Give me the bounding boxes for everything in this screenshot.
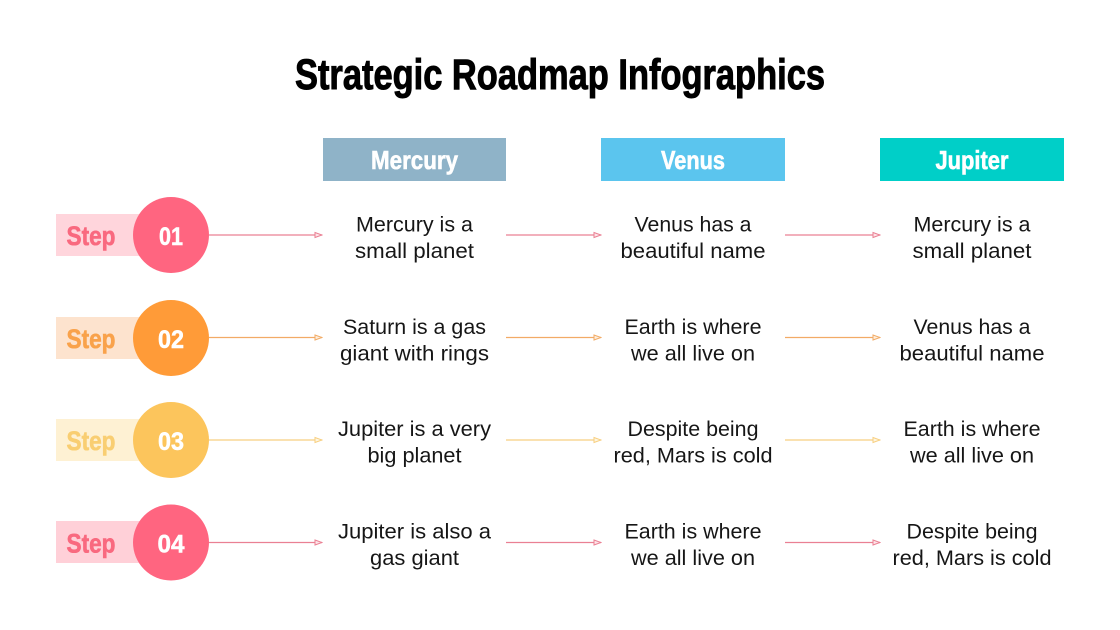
step 03 badge: 03 — [158, 428, 184, 456]
step 04 text: Earth is where — [624, 520, 762, 544]
step 04 text: we all live on — [630, 547, 755, 570]
step 04 badge — [56, 504, 209, 580]
step 03 text: Despite being — [628, 418, 758, 441]
step 02 text — [340, 316, 1044, 366]
step 02 text: beautiful name — [900, 342, 1044, 366]
step 01 text: Venus has a — [634, 214, 752, 236]
row: step 01 — [56, 197, 1032, 273]
header: Venus — [601, 138, 785, 181]
header: Mercury — [323, 138, 506, 181]
column headers — [323, 138, 1064, 181]
step 01 text: small planet — [355, 240, 474, 263]
step 01 text: beautiful name — [620, 240, 766, 263]
step 04 text — [338, 520, 1052, 570]
step 03 text — [338, 418, 1040, 468]
step 02 text: Earth is where — [624, 316, 762, 339]
step 03 arrows — [209, 439, 880, 441]
step 03 text: Jupiter is a very — [338, 418, 492, 441]
step 04 text: Despite being — [906, 520, 1038, 544]
step 01 text: Mercury is a — [914, 214, 1031, 236]
step 04 badge: Step — [66, 528, 116, 558]
row: step 03 — [56, 402, 1040, 478]
step 03 text: big planet — [368, 444, 462, 468]
step 01 text — [355, 214, 1032, 263]
step 02 badge — [56, 300, 209, 376]
title: Strategic Roadmap Infographics — [295, 51, 825, 99]
step 01 badge — [56, 197, 209, 273]
step 02 text: Saturn is a gas — [343, 316, 486, 339]
step 03 text: red, Mars is cold — [614, 444, 772, 468]
step 04 text: red, Mars is cold — [892, 547, 1052, 570]
step 03 text: we all live on — [909, 444, 1034, 468]
step 04 text: gas giant — [370, 547, 459, 570]
step 02 arrows — [209, 336, 880, 338]
step 01 arrows — [209, 234, 880, 236]
header: Mercury: Mercury — [371, 145, 458, 175]
step 02 text: Venus has a — [914, 316, 1031, 339]
step 01 text: Mercury is a — [356, 214, 473, 236]
header: Jupiter: Jupiter — [936, 145, 1008, 175]
step 02 text: we all live on — [630, 342, 755, 366]
step 01 badge: 01 — [159, 223, 183, 251]
header: Venus: Venus — [661, 145, 725, 175]
step 01 badge: Step — [66, 221, 116, 251]
step 03 badge — [56, 402, 209, 478]
step 04 text: Jupiter is also a — [338, 520, 491, 544]
step 04 badge: 04 — [158, 530, 185, 558]
header: Jupiter — [880, 138, 1064, 181]
step 04 arrows — [209, 542, 880, 544]
step 03 text: Earth is where — [904, 418, 1040, 441]
step 01 text: small planet — [912, 240, 1032, 263]
step 02 badge: Step — [66, 324, 116, 354]
row: step 02 — [56, 300, 1044, 376]
step 02 badge: 02 — [158, 326, 184, 354]
step 03 badge: Step — [66, 426, 116, 456]
row: step 04 — [56, 504, 1052, 580]
step 02 text: giant with rings — [340, 342, 489, 366]
